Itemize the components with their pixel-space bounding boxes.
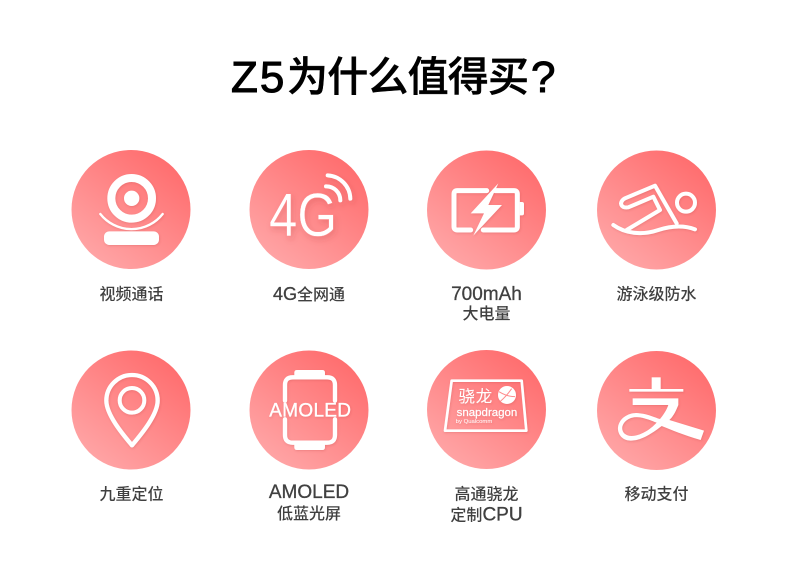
- panel: mobile payment: [597, 351, 716, 504]
- icon: watch with AMOLED: AMOLED: [269, 401, 351, 422]
- icon: battery with bolt: [427, 150, 546, 270]
- panel: video call: [72, 150, 190, 304]
- label: 九重定位: [99, 484, 164, 504]
- title: ?: [531, 53, 555, 102]
- icon: snapdragon chip: 骁龙: [458, 387, 492, 406]
- icon: alipay mark: [597, 351, 716, 470]
- panel: waterproof: [597, 150, 716, 304]
- icon: snapdragon chip: by Qualcomm: [456, 419, 493, 425]
- icon: swimmer: [597, 150, 716, 270]
- icon: watch with AMOLED: [250, 350, 368, 470]
- label: 视频通话: [99, 286, 164, 304]
- panel: location: [72, 350, 190, 504]
- label: 4G全网通: [273, 284, 345, 304]
- icon: camera: [72, 150, 190, 269]
- icon: map pin: [72, 350, 190, 470]
- icon: 4G signal: [250, 150, 368, 269]
- panel: 4G: [250, 150, 368, 304]
- title: 为什么值得买: [287, 43, 529, 103]
- icon: 4G signal: 4G: [269, 181, 337, 249]
- panel: battery: [427, 150, 546, 323]
- label line 2: 大电量: [462, 305, 511, 323]
- label: 高通骁龙: [454, 486, 519, 504]
- panel: snapdragon: [427, 350, 546, 526]
- icon: snapdragon chip: [427, 350, 546, 469]
- label line 2: 低蓝光屏: [277, 505, 341, 523]
- label: 700mAh: [451, 284, 522, 305]
- label: AMOLED: [269, 482, 349, 503]
- label line 2: 定制CPU: [450, 504, 523, 526]
- label: 移动支付: [624, 486, 689, 504]
- icon: snapdragon chip: snapdragon: [457, 407, 517, 419]
- panel: AMOLED: [250, 350, 368, 523]
- label: 游泳级防水: [616, 286, 697, 304]
- title: Z5: [231, 53, 286, 102]
